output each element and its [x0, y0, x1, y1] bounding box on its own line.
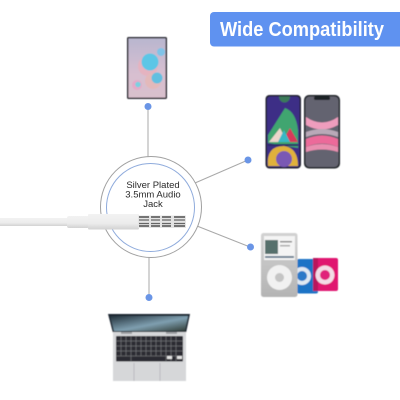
- connector: laptop: [146, 257, 152, 301]
- callout label: 3.5mm Audio: [125, 190, 181, 200]
- connector: phones: [195, 156, 252, 183]
- inner ring: [106, 164, 194, 252]
- audio jack and cable: [0, 214, 186, 230]
- icon: android phone: [266, 95, 301, 168]
- connector: music players: [197, 226, 254, 250]
- title badge: [210, 12, 400, 46]
- icon: iphone: [304, 95, 340, 168]
- callout label: Silver Plated: [126, 180, 180, 191]
- audio jack callout: [100, 156, 202, 258]
- outer ring: [100, 156, 202, 258]
- title badge: Wide Compatibility: [220, 19, 385, 41]
- icon: laptop: [108, 314, 190, 381]
- icon: tablet: [127, 37, 167, 99]
- callout label: Jack: [143, 199, 163, 210]
- icon: ipod classic: [261, 233, 338, 297]
- connector: tablet: [144, 103, 152, 157]
